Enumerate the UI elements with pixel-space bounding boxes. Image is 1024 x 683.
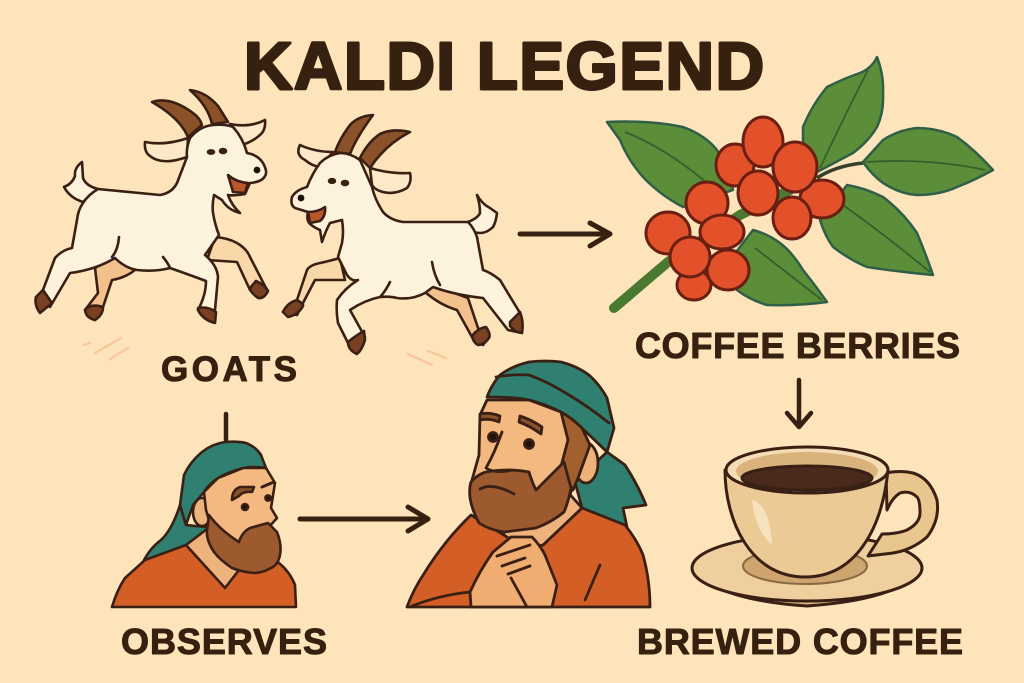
body and head — [36, 125, 266, 310]
label: observes: OBSERVES — [121, 621, 327, 662]
shirt — [407, 508, 650, 607]
icon: coffee branch — [607, 57, 993, 308]
scarf tail — [143, 505, 235, 562]
eyes and nose — [329, 179, 335, 183]
icon: right goat — [283, 115, 523, 354]
coffee surface — [742, 466, 872, 490]
icon: small Kaldi observing — [112, 442, 296, 607]
tail — [468, 195, 497, 233]
face — [204, 468, 277, 545]
arrow: goats to berries — [520, 223, 610, 246]
ear — [574, 443, 598, 483]
veins — [625, 70, 985, 300]
neck — [186, 526, 255, 588]
stem — [614, 190, 790, 308]
shirt — [112, 545, 296, 607]
ears — [298, 145, 333, 167]
tail — [64, 162, 98, 202]
label: coffee berries: COFFEE BERRIES — [635, 325, 960, 366]
far legs — [283, 258, 345, 315]
eyebrows — [480, 413, 500, 422]
cup highlight — [752, 500, 772, 545]
neck — [500, 490, 582, 546]
handle — [868, 472, 938, 556]
body and head — [291, 153, 522, 353]
clasped hands — [470, 537, 557, 607]
ear — [193, 498, 211, 526]
face — [472, 400, 582, 525]
leaves — [607, 122, 733, 207]
beard — [207, 515, 281, 573]
arrow: berries to coffee — [787, 380, 811, 427]
title: KALDI LEGEND — [244, 29, 764, 104]
label: goats: GOATS — [161, 350, 297, 389]
icon: coffee cup — [692, 447, 938, 606]
arrow: observes to thinking — [300, 507, 428, 531]
eyes — [242, 504, 248, 510]
eyes — [488, 432, 498, 442]
beard — [470, 462, 571, 532]
bandana — [487, 361, 614, 452]
eyes and nose — [208, 150, 214, 154]
icon: left goat — [36, 90, 268, 323]
mouth — [228, 175, 248, 193]
connector line — [224, 414, 228, 442]
hair — [560, 412, 590, 490]
ears — [230, 120, 265, 145]
hooves — [36, 290, 52, 313]
eyebrows — [232, 487, 254, 500]
horns — [152, 100, 202, 137]
bandana — [180, 442, 266, 525]
far legs — [207, 237, 267, 298]
horns — [335, 115, 373, 154]
hooves — [283, 300, 303, 317]
mouth — [308, 207, 325, 223]
nose and mouth — [486, 432, 512, 472]
icon: large Kaldi thinking — [407, 361, 650, 607]
cup body — [725, 470, 888, 577]
saucer — [695, 572, 920, 606]
label: brewed coffee: BREWED COFFEE — [637, 621, 963, 662]
berries — [646, 117, 844, 300]
scarf tail — [575, 452, 646, 527]
dust marks — [84, 338, 446, 365]
